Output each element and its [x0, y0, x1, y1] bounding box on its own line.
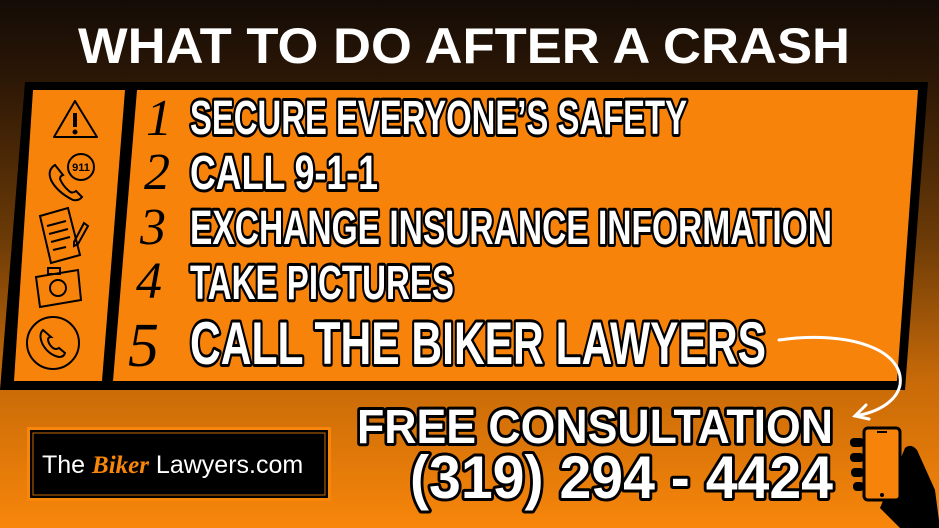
- icon: hand holding phone: [850, 428, 939, 528]
- consultation text: [357, 401, 834, 511]
- icons column: [27, 101, 97, 369]
- icon: camera: [36, 268, 81, 307]
- icon: warning: [54, 101, 97, 137]
- step 1: 1: [146, 90, 172, 147]
- step 2: [144, 144, 378, 201]
- consultation text: FREE CONSULTATION: [357, 401, 833, 454]
- logo: [27, 427, 331, 501]
- step 5: 5: [128, 312, 159, 380]
- icon: document: [40, 208, 88, 263]
- step 4: 4: [136, 253, 162, 310]
- step 5: [128, 310, 766, 380]
- step 2: 2: [144, 144, 170, 201]
- logo: The Biker Lawyers.com: [42, 451, 303, 479]
- step 2: CALL 9-1-1: [190, 147, 378, 200]
- step 4: [136, 253, 454, 310]
- step 4: TAKE PICTURES: [190, 257, 454, 310]
- step 1: [146, 90, 687, 147]
- panel: steps frame: [0, 82, 928, 390]
- title: WHAT TO DO AFTER A CRASH: [78, 18, 850, 74]
- arrow: [779, 337, 900, 419]
- steps list: [128, 90, 832, 380]
- icon: 911 phone: 911: [72, 162, 90, 174]
- step 3: 3: [139, 199, 166, 256]
- consultation text: (319) 294 - 4424: [410, 444, 834, 511]
- step 1: SECURE EVERYONE’S SAFETY: [190, 92, 687, 145]
- icon: 911 phone: [50, 154, 94, 200]
- icon: phone circle: [27, 317, 79, 369]
